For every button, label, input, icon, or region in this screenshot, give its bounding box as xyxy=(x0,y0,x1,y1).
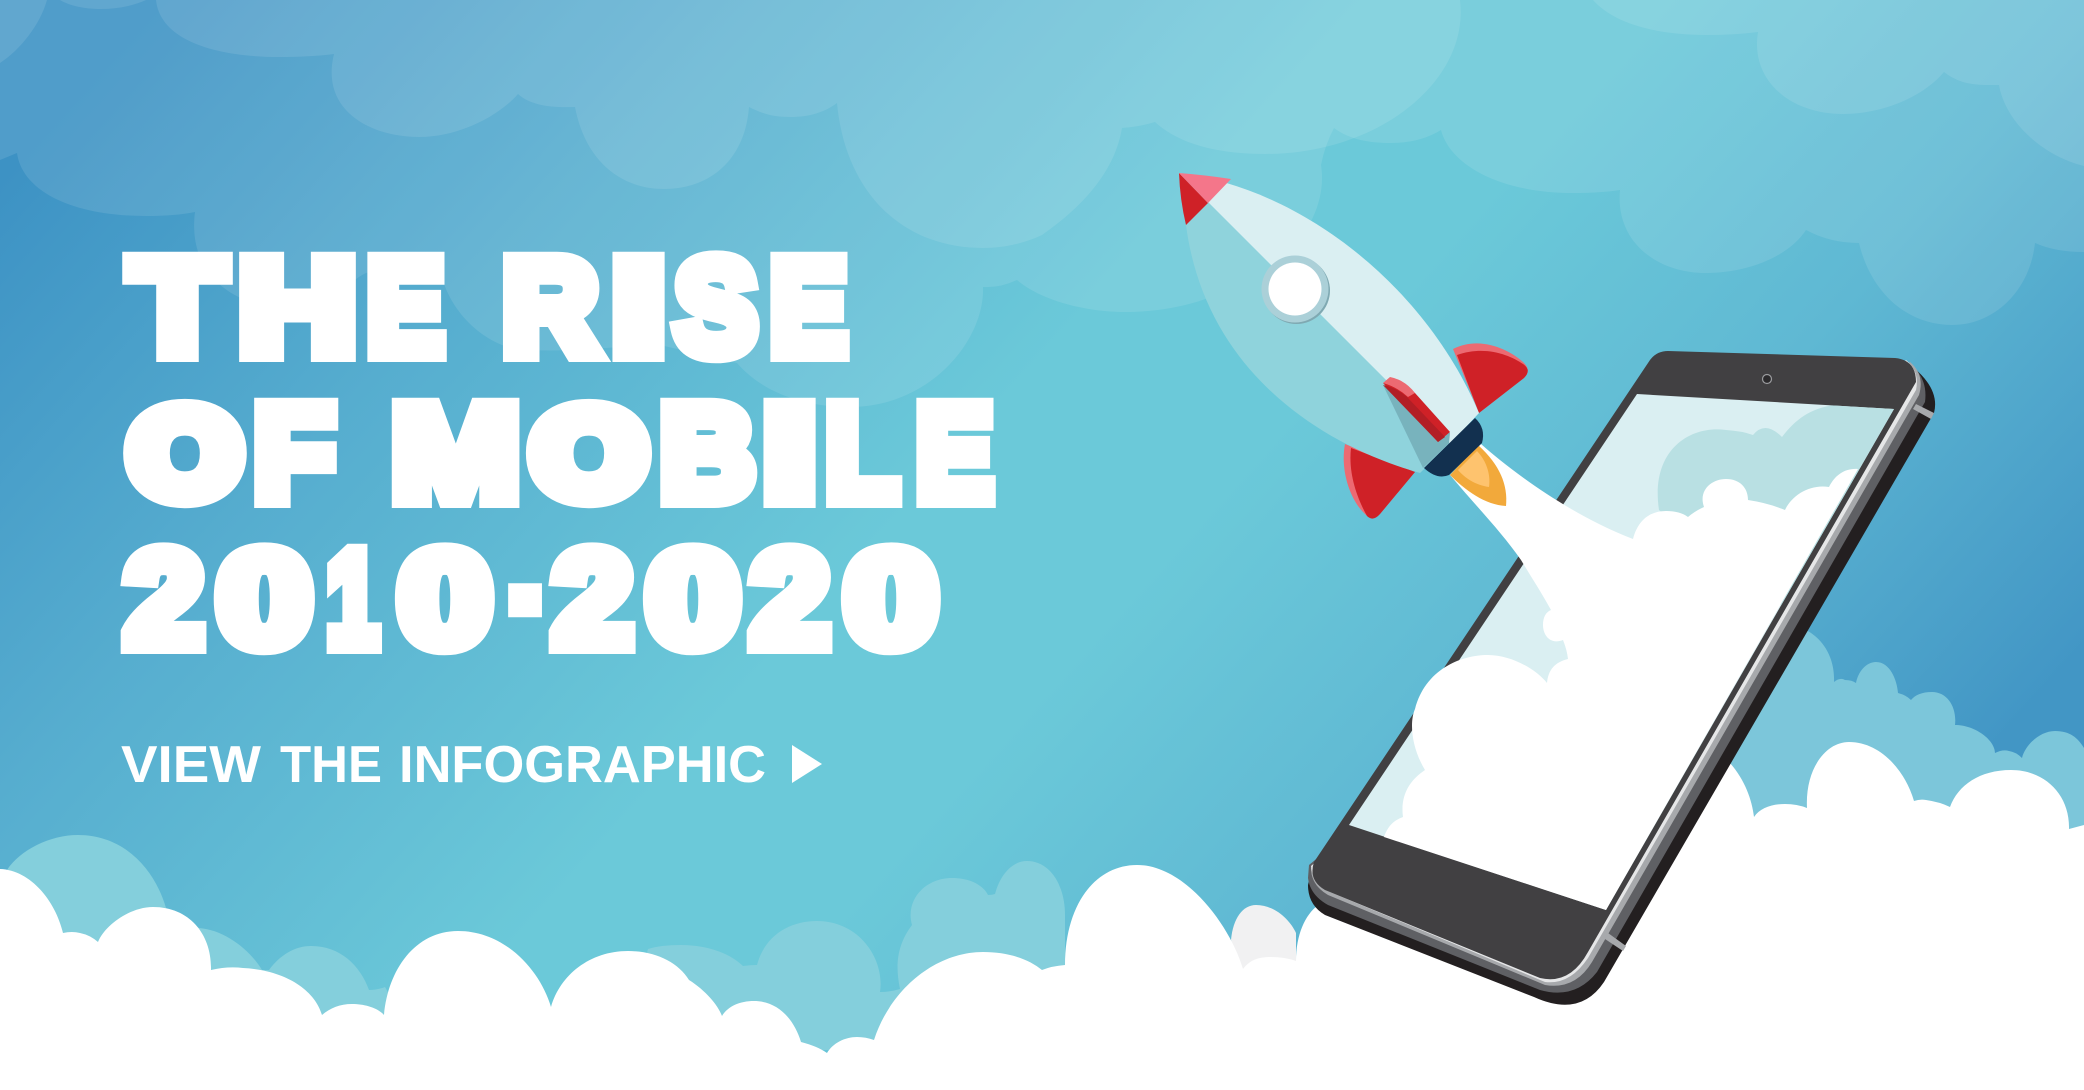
rocket nose red xyxy=(1179,173,1208,225)
center fin xyxy=(1383,377,1450,442)
clouds: upper back layer xyxy=(0,0,2084,407)
clouds: top-left corner puff xyxy=(0,0,146,63)
rocket nozzle xyxy=(1424,418,1483,476)
title line 3: 2 xyxy=(751,525,829,674)
clouds: lower-left back layer xyxy=(0,835,1065,1050)
phone face xyxy=(1312,351,1916,979)
title line 1: T xyxy=(131,233,224,382)
rocket flame xyxy=(1450,445,1506,506)
title line 1: I xyxy=(612,233,665,382)
title line 1: R xyxy=(503,233,598,382)
icon: play arrow xyxy=(792,745,822,783)
title line 2: O xyxy=(534,386,645,522)
title line 1: H xyxy=(239,233,356,382)
clouds: upper middle layer xyxy=(156,0,1461,248)
phone xyxy=(1308,351,1935,1005)
title line 2: I xyxy=(764,379,816,528)
title line 3: 0 xyxy=(399,525,491,674)
title xyxy=(125,233,993,674)
title line 2: B xyxy=(660,379,754,528)
center fin shadow xyxy=(1383,385,1450,468)
screen back cloud xyxy=(1658,405,1900,620)
title line 2: E xyxy=(916,379,993,528)
phone antenna band lower xyxy=(1605,933,1626,951)
title line 1: S xyxy=(675,233,756,382)
clouds: white foreground bank xyxy=(0,742,2084,1090)
camera xyxy=(1762,374,1772,384)
title line 2: F xyxy=(254,379,334,528)
rocket body light side xyxy=(1179,173,1479,444)
phone antenna band upper xyxy=(1913,404,1934,419)
title line 3: 0 xyxy=(218,525,311,674)
title line 2: O xyxy=(131,386,240,522)
phone casing: dark grey band xyxy=(1308,365,1925,993)
call to action text: VIEW xyxy=(121,736,262,794)
rocket nose pink xyxy=(1179,173,1231,203)
exhaust cloud over phone screen xyxy=(1384,444,1858,910)
title line 3: 2 xyxy=(125,525,203,674)
phone casing: highlight xyxy=(1311,360,1917,982)
rocket left fin xyxy=(1344,444,1415,519)
phone casing: silver band xyxy=(1311,362,1921,986)
clouds: lower-right back layer xyxy=(1600,630,2084,900)
rocket body shaded side xyxy=(1179,173,1450,473)
cloud: small grey puff xyxy=(1231,905,1296,975)
title line 1: E xyxy=(367,233,444,382)
phone screen xyxy=(1349,394,1894,910)
title line 3: 1 xyxy=(327,525,378,674)
call to action text: INFOGRAPHIC xyxy=(399,736,766,794)
title line 3: 0 xyxy=(647,525,739,674)
title line 2: M xyxy=(392,379,519,528)
rocket right fin xyxy=(1453,343,1528,413)
title line 3: - xyxy=(511,515,540,664)
title line 1: E xyxy=(770,233,847,382)
call to action text: THE xyxy=(280,736,382,794)
phone casing: black outer edge xyxy=(1308,368,1935,1005)
title line 3: 2 xyxy=(553,525,632,674)
porthole xyxy=(1262,256,1330,324)
title line 3: 0 xyxy=(845,525,937,674)
clouds: top-right puff xyxy=(1593,0,2084,166)
title line 2: L xyxy=(826,379,898,528)
rocket xyxy=(1179,173,1528,519)
